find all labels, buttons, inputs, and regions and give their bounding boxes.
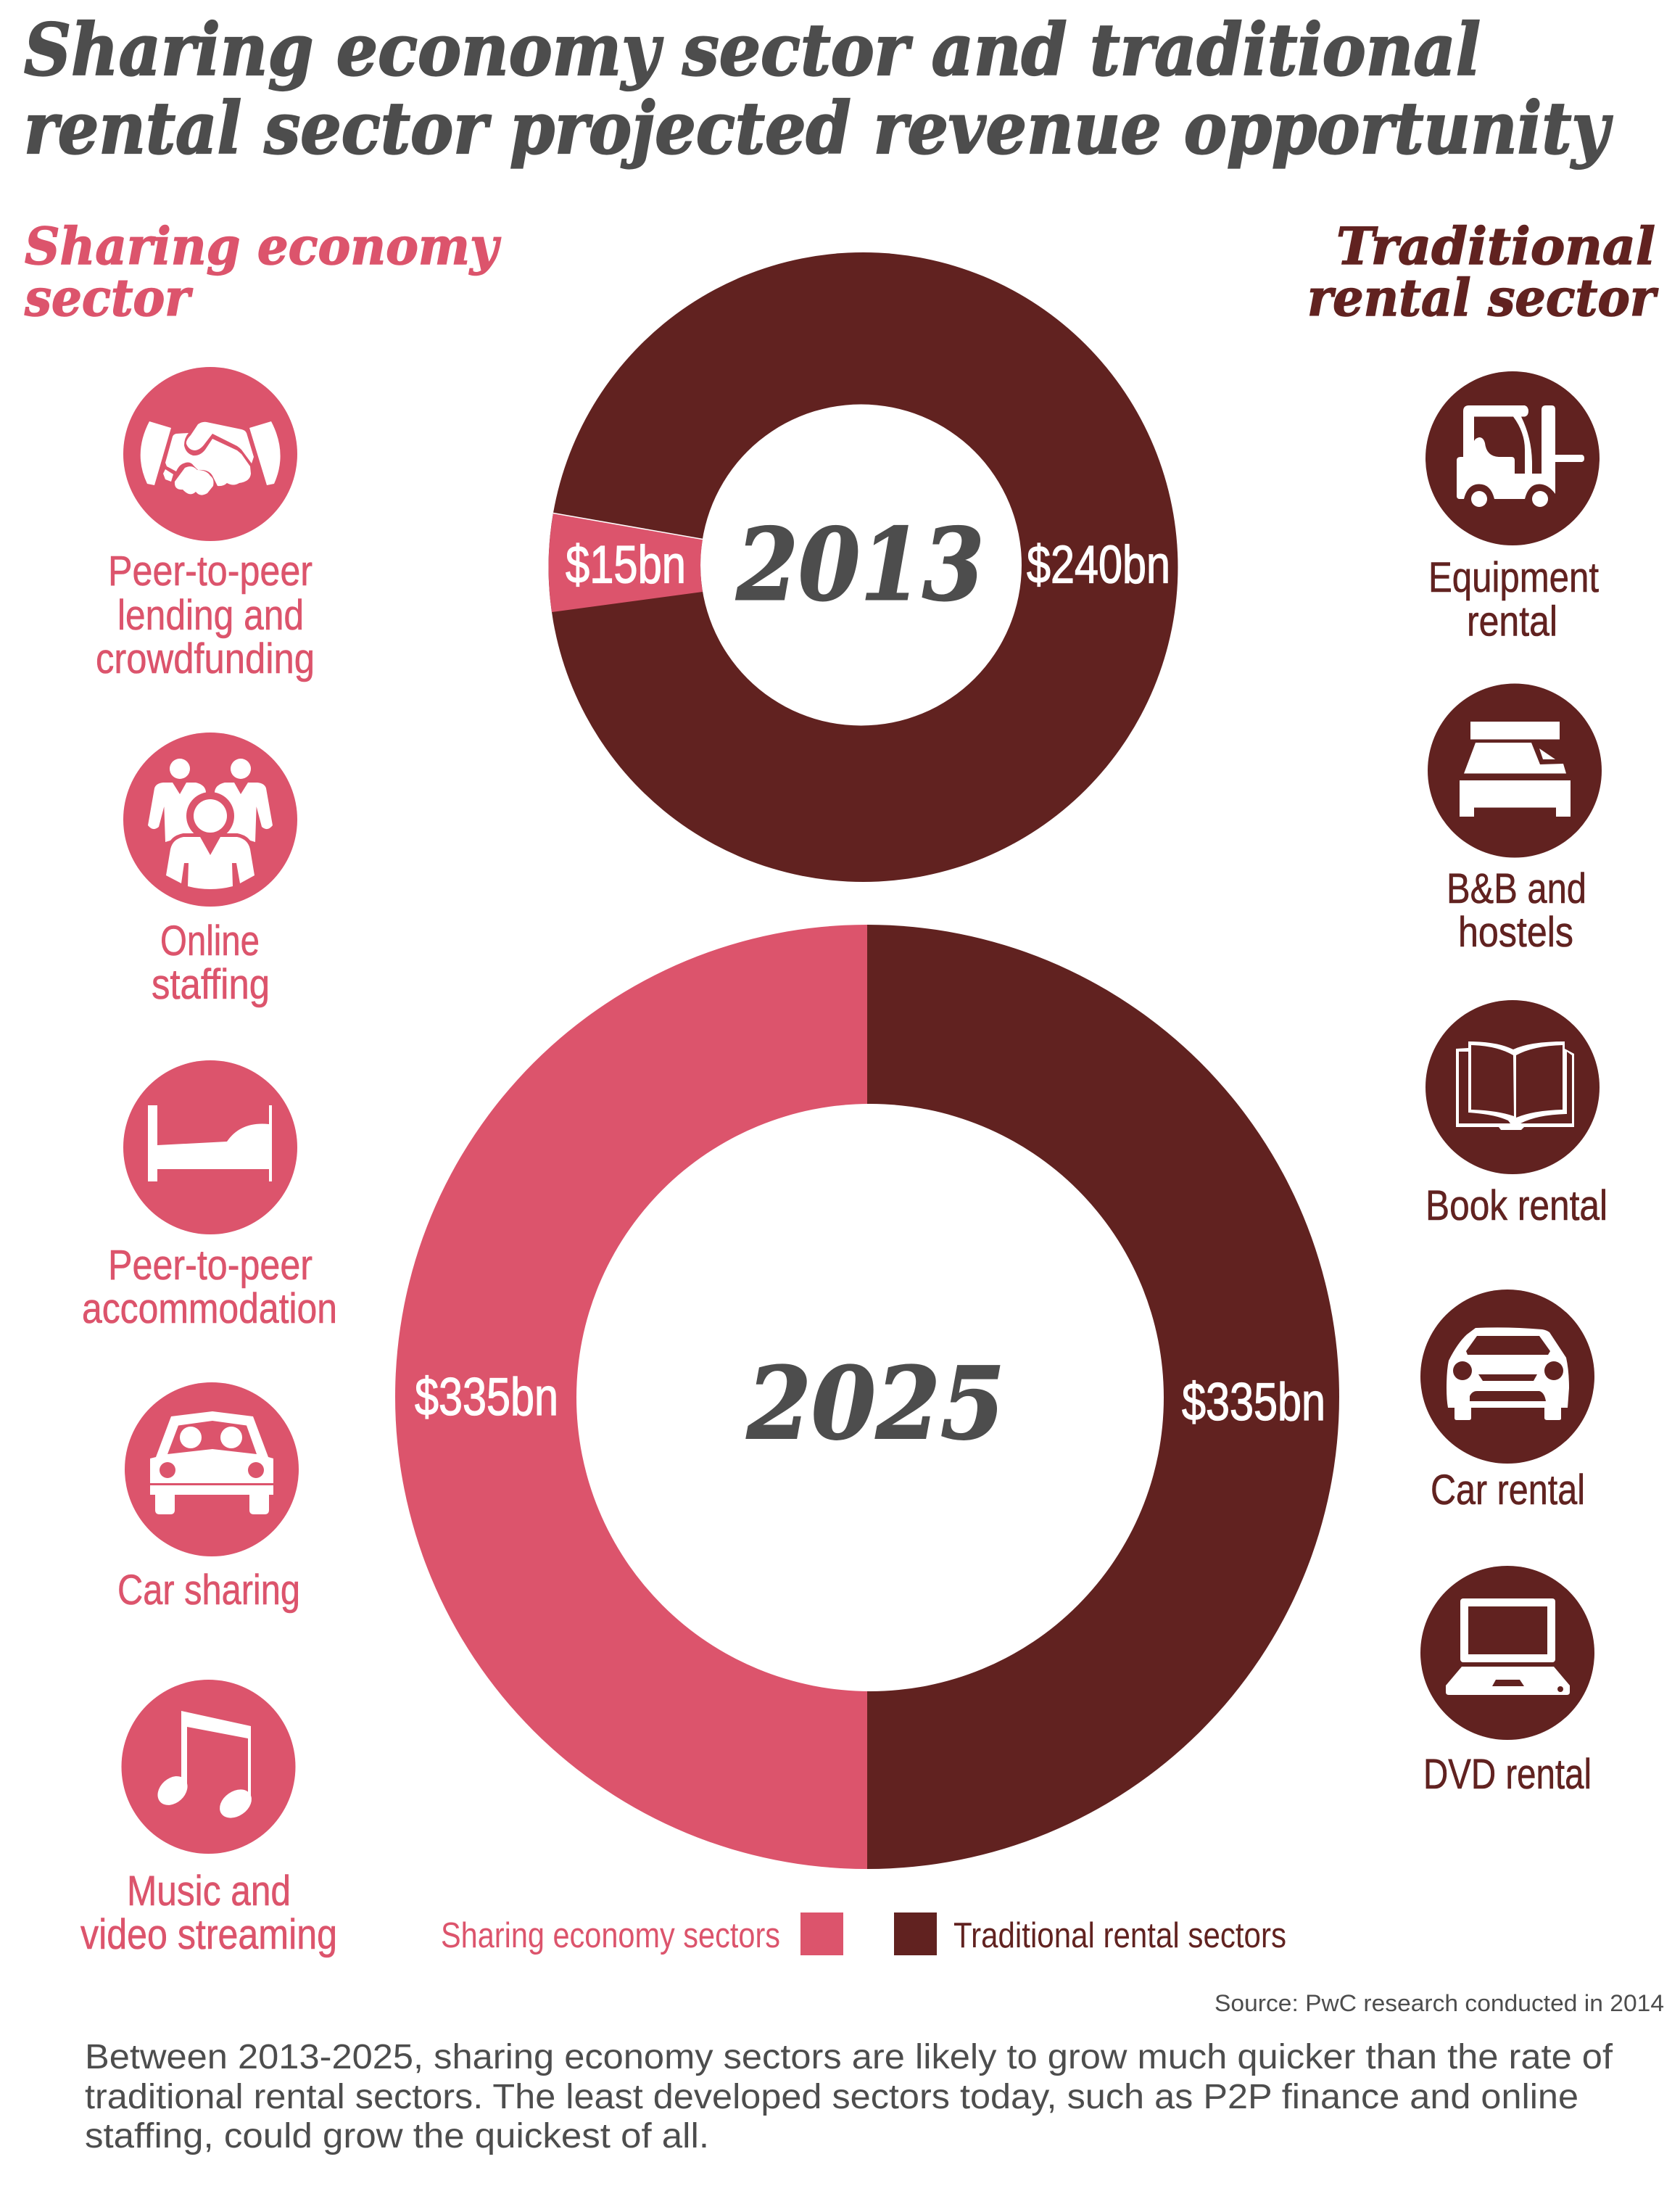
label: Peer-to-peer bbox=[108, 548, 313, 595]
icon: bed front view bbox=[1428, 683, 1602, 857]
item: book rental bbox=[1425, 1000, 1607, 1229]
icon: open book bbox=[1425, 1000, 1600, 1174]
icon: music notes bbox=[122, 1680, 296, 1854]
legend: traditional rental sectors bbox=[894, 1913, 1286, 1955]
item: car rental bbox=[1420, 1290, 1594, 1514]
heading: sharing economy sector: Sharing economy bbox=[25, 216, 501, 276]
label: rental bbox=[1467, 598, 1557, 645]
icon: people bbox=[123, 733, 297, 907]
donut chart: 2025: $335bn bbox=[415, 1368, 558, 1427]
legend bbox=[441, 1913, 1286, 1955]
panel: traditional rental sector bbox=[1307, 216, 1659, 1798]
summary text: Between 2013-2025, sharing economy sectors are likely to grow much quicker than the rate of bbox=[85, 2038, 1613, 2076]
label: video streaming bbox=[80, 1911, 337, 1958]
icon: bed bbox=[123, 1060, 297, 1234]
label: accommodation bbox=[82, 1285, 337, 1332]
label: crowdfunding bbox=[96, 635, 315, 682]
label: hostels bbox=[1458, 909, 1573, 956]
label bbox=[1447, 865, 1586, 956]
donut chart: 2013: $240bn bbox=[1027, 535, 1170, 595]
donut chart: 2025: 2025 bbox=[746, 1345, 1005, 1462]
item: equipment rental bbox=[1425, 371, 1600, 645]
item: peer-to-peer lending and crowdfunding bbox=[96, 367, 315, 682]
label: B&B and bbox=[1447, 865, 1586, 912]
icon: handshake bbox=[123, 367, 297, 541]
panel: sharing economy sector bbox=[24, 216, 501, 1958]
label: lending and bbox=[117, 592, 304, 639]
label: Book rental bbox=[1425, 1182, 1607, 1229]
item: music and video streaming bbox=[80, 1680, 337, 1958]
label: Equipment bbox=[1428, 554, 1599, 601]
label: Online bbox=[160, 917, 260, 965]
title: Sharing economy sector and traditional bbox=[24, 9, 1481, 92]
title bbox=[24, 9, 1613, 170]
heading: traditional rental sector bbox=[1307, 216, 1659, 328]
donut chart: 2025 bbox=[395, 925, 1339, 1869]
label: Car rental bbox=[1431, 1466, 1585, 1514]
item: B&B and hostels bbox=[1428, 683, 1602, 956]
heading: sharing economy sector bbox=[24, 216, 501, 328]
label: Peer-to-peer bbox=[108, 1242, 313, 1289]
label bbox=[1428, 554, 1599, 645]
item: car sharing bbox=[117, 1382, 300, 1614]
heading: traditional rental sector: rental sector bbox=[1307, 268, 1659, 328]
label bbox=[80, 1868, 337, 1958]
summary text: traditional rental sectors. The least developed sectors today, such as P2P finance and online bbox=[85, 2078, 1578, 2116]
item: peer-to-peer accommodation bbox=[82, 1060, 337, 1332]
source note: Source: PwC research conducted in 2014 bbox=[1215, 1990, 1664, 2016]
label: staffing bbox=[152, 961, 270, 1008]
item: DVD rental bbox=[1420, 1566, 1594, 1798]
label: Car sharing bbox=[117, 1567, 300, 1614]
summary text bbox=[85, 2038, 1613, 2155]
summary text: staffing, could grow the quickest of all. bbox=[85, 2117, 709, 2155]
label bbox=[152, 917, 270, 1008]
label: Music and bbox=[127, 1868, 291, 1915]
icon: forklift bbox=[1425, 371, 1600, 545]
donut chart: 2013: $15bn bbox=[566, 535, 686, 595]
heading: sharing economy sector: sector bbox=[24, 268, 194, 328]
donut chart: 2013: 2013 bbox=[736, 506, 985, 624]
donut chart: 2025: $335bn bbox=[1182, 1373, 1325, 1432]
label bbox=[82, 1242, 337, 1332]
icon: car front with passengers bbox=[125, 1382, 299, 1556]
legend: traditional rental sectors: Traditional rental sectors bbox=[953, 1916, 1286, 1955]
item: online staffing bbox=[123, 733, 297, 1008]
icon: car bbox=[1420, 1290, 1594, 1464]
legend: sharing economy sectors: Sharing economy sectors bbox=[441, 1916, 780, 1955]
label: DVD rental bbox=[1423, 1751, 1592, 1798]
donut chart: 2013 bbox=[548, 252, 1178, 882]
icon: laptop bbox=[1420, 1566, 1594, 1740]
heading: traditional rental sector: Traditional bbox=[1336, 216, 1655, 276]
label bbox=[96, 548, 315, 682]
